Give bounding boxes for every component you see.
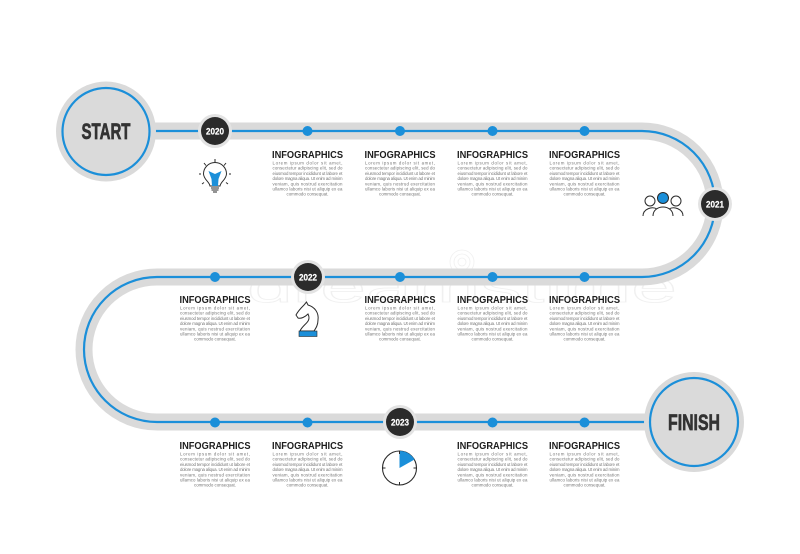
text block: bottom 3: eiusmod tempor incididunt ut labore et xyxy=(458,462,528,467)
text block: bottom 2 xyxy=(272,440,343,488)
text block: middle 3: commodo consequat. xyxy=(472,337,513,342)
icon: team of people xyxy=(643,192,683,216)
text block: top 4 xyxy=(549,149,620,197)
text block: bottom 1: Lorem ipsum dolor sit amet, xyxy=(180,452,250,456)
text block: top 1: consectetur adipiscing elit, sed do xyxy=(272,166,343,171)
text block: top 2: consectetur adipiscing elit, sed do xyxy=(365,166,436,171)
text block: middle 4 xyxy=(549,294,620,342)
text block: bottom 4: veniam, quis nostrud exercitation xyxy=(550,472,620,477)
text block: middle 1: eiusmod tempor incididunt ut labore et xyxy=(180,316,251,321)
text block: top 3: Lorem ipsum dolor sit amet, xyxy=(458,160,528,166)
icon: clock with wedge xyxy=(382,451,416,485)
text block: bottom 2: veniam, quis nostrud exercitation xyxy=(272,472,343,477)
text block: bottom 4: dolore magna aliqua. Ut enim ad minim xyxy=(550,467,620,472)
text block: top 4: commodo consequat. xyxy=(564,192,605,197)
watermark: dreamstime xyxy=(247,263,677,312)
text block: middle 2: INFOGRAPHICS xyxy=(364,294,436,306)
text block: middle 4: ullamco laboris nisi ut aliquip ex ea xyxy=(550,332,620,336)
text block: top 2: eiusmod tempor incididunt ut labore et xyxy=(365,171,436,176)
text block: bottom 3: commodo consequat. xyxy=(472,483,513,488)
text block: middle 3: veniam, quis nostrud exercitation xyxy=(458,326,528,331)
text block: bottom 4: eiusmod tempor incididunt ut labore et xyxy=(550,462,620,467)
text block: bottom 1: eiusmod tempor incididunt ut labore et xyxy=(180,462,251,467)
year marker 2023: 2023 xyxy=(391,418,409,428)
text block: top 1: veniam, quis nostrud exercitation xyxy=(272,181,343,186)
text block: top 3: eiusmod tempor incididunt ut labore et xyxy=(458,171,528,176)
text block: middle 4: commodo consequat. xyxy=(564,337,605,342)
text block: top 4: Lorem ipsum dolor sit amet, xyxy=(550,160,620,166)
text block: bottom 4: ullamco laboris nisi ut aliquip ex ea xyxy=(550,478,620,482)
text block: bottom 3: veniam, quis nostrud exercitation xyxy=(458,472,528,477)
text block: bottom 3: dolore magna aliqua. Ut enim ad minim xyxy=(458,467,528,472)
text block: bottom 1: veniam, quis nostrud exercitation xyxy=(180,472,251,477)
text block: middle 2: eiusmod tempor incididunt ut labore et xyxy=(365,316,436,321)
text block: middle 1: Lorem ipsum dolor sit amet, xyxy=(180,306,250,310)
text block: top 1: eiusmod tempor incididunt ut labore et xyxy=(272,171,343,176)
text block: middle 2: commodo consequat. xyxy=(379,337,421,342)
text block: top 2: commodo consequat. xyxy=(379,192,421,197)
icon: light bulb xyxy=(199,159,231,192)
road: grey track xyxy=(84,131,715,422)
text block: middle 2: veniam, quis nostrud exercitation xyxy=(365,326,436,331)
text block: middle 3: Lorem ipsum dolor sit amet, xyxy=(458,306,528,310)
text block: top 2: dolore magna aliqua. Ut enim ad minim xyxy=(365,176,435,181)
text block: top 4: veniam, quis nostrud exercitation xyxy=(550,181,620,186)
text block: bottom 3: ullamco laboris nisi ut aliquip ex ea xyxy=(458,478,528,482)
text block: top 3: consectetur adipiscing elit, sed do xyxy=(458,166,528,171)
text block: middle 1: dolore magna aliqua. Ut enim ad minim xyxy=(180,321,250,326)
text block: top 1: dolore magna aliqua. Ut enim ad minim xyxy=(272,176,343,181)
text block: bottom 4: consectetur adipiscing elit, sed do xyxy=(550,457,620,462)
text block: middle 1: ullamco laboris nisi ut aliquip ex ea xyxy=(180,332,251,336)
year marker 2021: 2021 xyxy=(706,200,724,210)
text block: top 3: veniam, quis nostrud exercitation xyxy=(458,181,528,186)
text block: top 2 xyxy=(364,149,436,197)
text block: top 4: eiusmod tempor incididunt ut labore et xyxy=(550,171,620,176)
text block: middle 2: dolore magna aliqua. Ut enim ad minim xyxy=(365,321,435,326)
text block: middle 4: Lorem ipsum dolor sit amet, xyxy=(550,306,620,310)
text block: middle 1 xyxy=(180,294,251,342)
text block: top 1: INFOGRAPHICS xyxy=(272,149,343,161)
start badge: START xyxy=(82,119,131,144)
text block: top 3: dolore magna aliqua. Ut enim ad minim xyxy=(458,176,528,181)
text block: top 4: ullamco laboris nisi ut aliquip ex ea xyxy=(550,186,620,192)
icon: chess knight xyxy=(296,302,318,336)
finish badge: FINISH xyxy=(668,410,720,435)
text block: bottom 4: commodo consequat. xyxy=(564,483,605,488)
text block: bottom 3: INFOGRAPHICS xyxy=(457,440,528,452)
text block: middle 2: consectetur adipiscing elit, sed do xyxy=(365,311,436,316)
text block: top 1 xyxy=(272,149,343,197)
text block: bottom 1 xyxy=(180,440,251,488)
text block: top 1: ullamco laboris nisi ut aliquip ex ea xyxy=(272,186,343,192)
text block: top 2: veniam, quis nostrud exercitation xyxy=(365,181,436,186)
text block: top 3: commodo consequat. xyxy=(472,192,513,197)
text block: top 3: ullamco laboris nisi ut aliquip ex ea xyxy=(458,186,528,192)
text block: middle 1: INFOGRAPHICS xyxy=(180,294,250,306)
text block: top 1: commodo consequat. xyxy=(287,192,328,197)
text block: bottom 1: commodo consequat. xyxy=(194,483,236,488)
year marker 2021 xyxy=(698,187,732,221)
text block: top 2: Lorem ipsum dolor sit amet, xyxy=(365,160,435,166)
text block: bottom 2: INFOGRAPHICS xyxy=(272,440,343,452)
year marker 2023 xyxy=(383,405,417,439)
text block: bottom 2: Lorem ipsum dolor sit amet, xyxy=(272,452,342,456)
text block: bottom 1: dolore magna aliqua. Ut enim ad minim xyxy=(180,467,250,472)
year marker 2022: 2022 xyxy=(299,272,317,282)
text block: top 4: INFOGRAPHICS xyxy=(549,149,620,161)
text block: middle 3: INFOGRAPHICS xyxy=(457,294,528,306)
text block: middle 3: consectetur adipiscing elit, sed do xyxy=(458,311,528,316)
text block: middle 3: ullamco laboris nisi ut aliquip ex ea xyxy=(458,332,528,336)
text block: bottom 2: dolore magna aliqua. Ut enim ad minim xyxy=(272,467,343,472)
text block: middle 4: eiusmod tempor incididunt ut labore et xyxy=(550,316,620,321)
text block: middle 4: veniam, quis nostrud exercitation xyxy=(550,326,620,331)
text block: middle 2: ullamco laboris nisi ut aliquip ex ea xyxy=(365,332,436,336)
text block: middle 4: consectetur adipiscing elit, sed do xyxy=(550,311,620,316)
text block: bottom 3: Lorem ipsum dolor sit amet, xyxy=(458,452,528,456)
text block: middle 1: commodo consequat. xyxy=(194,337,236,342)
text block: middle 2 xyxy=(364,294,436,342)
text block: bottom 2: eiusmod tempor incididunt ut labore et xyxy=(272,462,343,467)
text block: middle 1: veniam, quis nostrud exercitation xyxy=(180,326,251,331)
year marker 2020: 2020 xyxy=(206,126,224,136)
text block: bottom 3 xyxy=(457,440,528,488)
text block: middle 4: INFOGRAPHICS xyxy=(549,294,620,306)
text block: bottom 1: consectetur adipiscing elit, sed do xyxy=(180,457,251,462)
text block: bottom 4: INFOGRAPHICS xyxy=(549,440,620,452)
text block: top 2: INFOGRAPHICS xyxy=(364,149,436,161)
text block: bottom 3: consectetur adipiscing elit, sed do xyxy=(458,457,528,462)
text block: bottom 2: ullamco laboris nisi ut aliquip ex ea xyxy=(272,478,343,482)
year marker 2020 xyxy=(198,114,232,148)
text block: bottom 1: INFOGRAPHICS xyxy=(180,440,250,452)
step dots xyxy=(210,126,590,428)
text block: bottom 2: consectetur adipiscing elit, sed do xyxy=(272,457,343,462)
text block: middle 3: eiusmod tempor incididunt ut labore et xyxy=(458,316,528,321)
text block: bottom 1: ullamco laboris nisi ut aliquip ex ea xyxy=(180,478,251,482)
year marker 2022 xyxy=(291,260,325,294)
start badge xyxy=(56,82,156,182)
text block: middle 3: dolore magna aliqua. Ut enim ad minim xyxy=(458,321,528,326)
watermark xyxy=(247,250,677,312)
text block: top 4: dolore magna aliqua. Ut enim ad minim xyxy=(550,176,620,181)
text block: middle 3 xyxy=(457,294,528,342)
text block: middle 2: Lorem ipsum dolor sit amet, xyxy=(365,306,435,310)
text block: top 2: ullamco laboris nisi ut aliquip ex ea xyxy=(365,186,436,192)
text block: bottom 4 xyxy=(549,440,620,488)
text block: middle 1: consectetur adipiscing elit, sed do xyxy=(180,311,251,316)
finish badge xyxy=(644,372,744,472)
text block: bottom 2: commodo consequat. xyxy=(287,483,328,488)
text block: top 4: consectetur adipiscing elit, sed do xyxy=(550,166,620,171)
text block: top 3 xyxy=(457,149,528,197)
road: blue line xyxy=(84,131,715,422)
text block: top 3: INFOGRAPHICS xyxy=(457,149,528,161)
text block: top 1: Lorem ipsum dolor sit amet, xyxy=(272,160,342,166)
text block: bottom 4: Lorem ipsum dolor sit amet, xyxy=(550,452,620,456)
text block: middle 4: dolore magna aliqua. Ut enim ad minim xyxy=(550,321,620,326)
